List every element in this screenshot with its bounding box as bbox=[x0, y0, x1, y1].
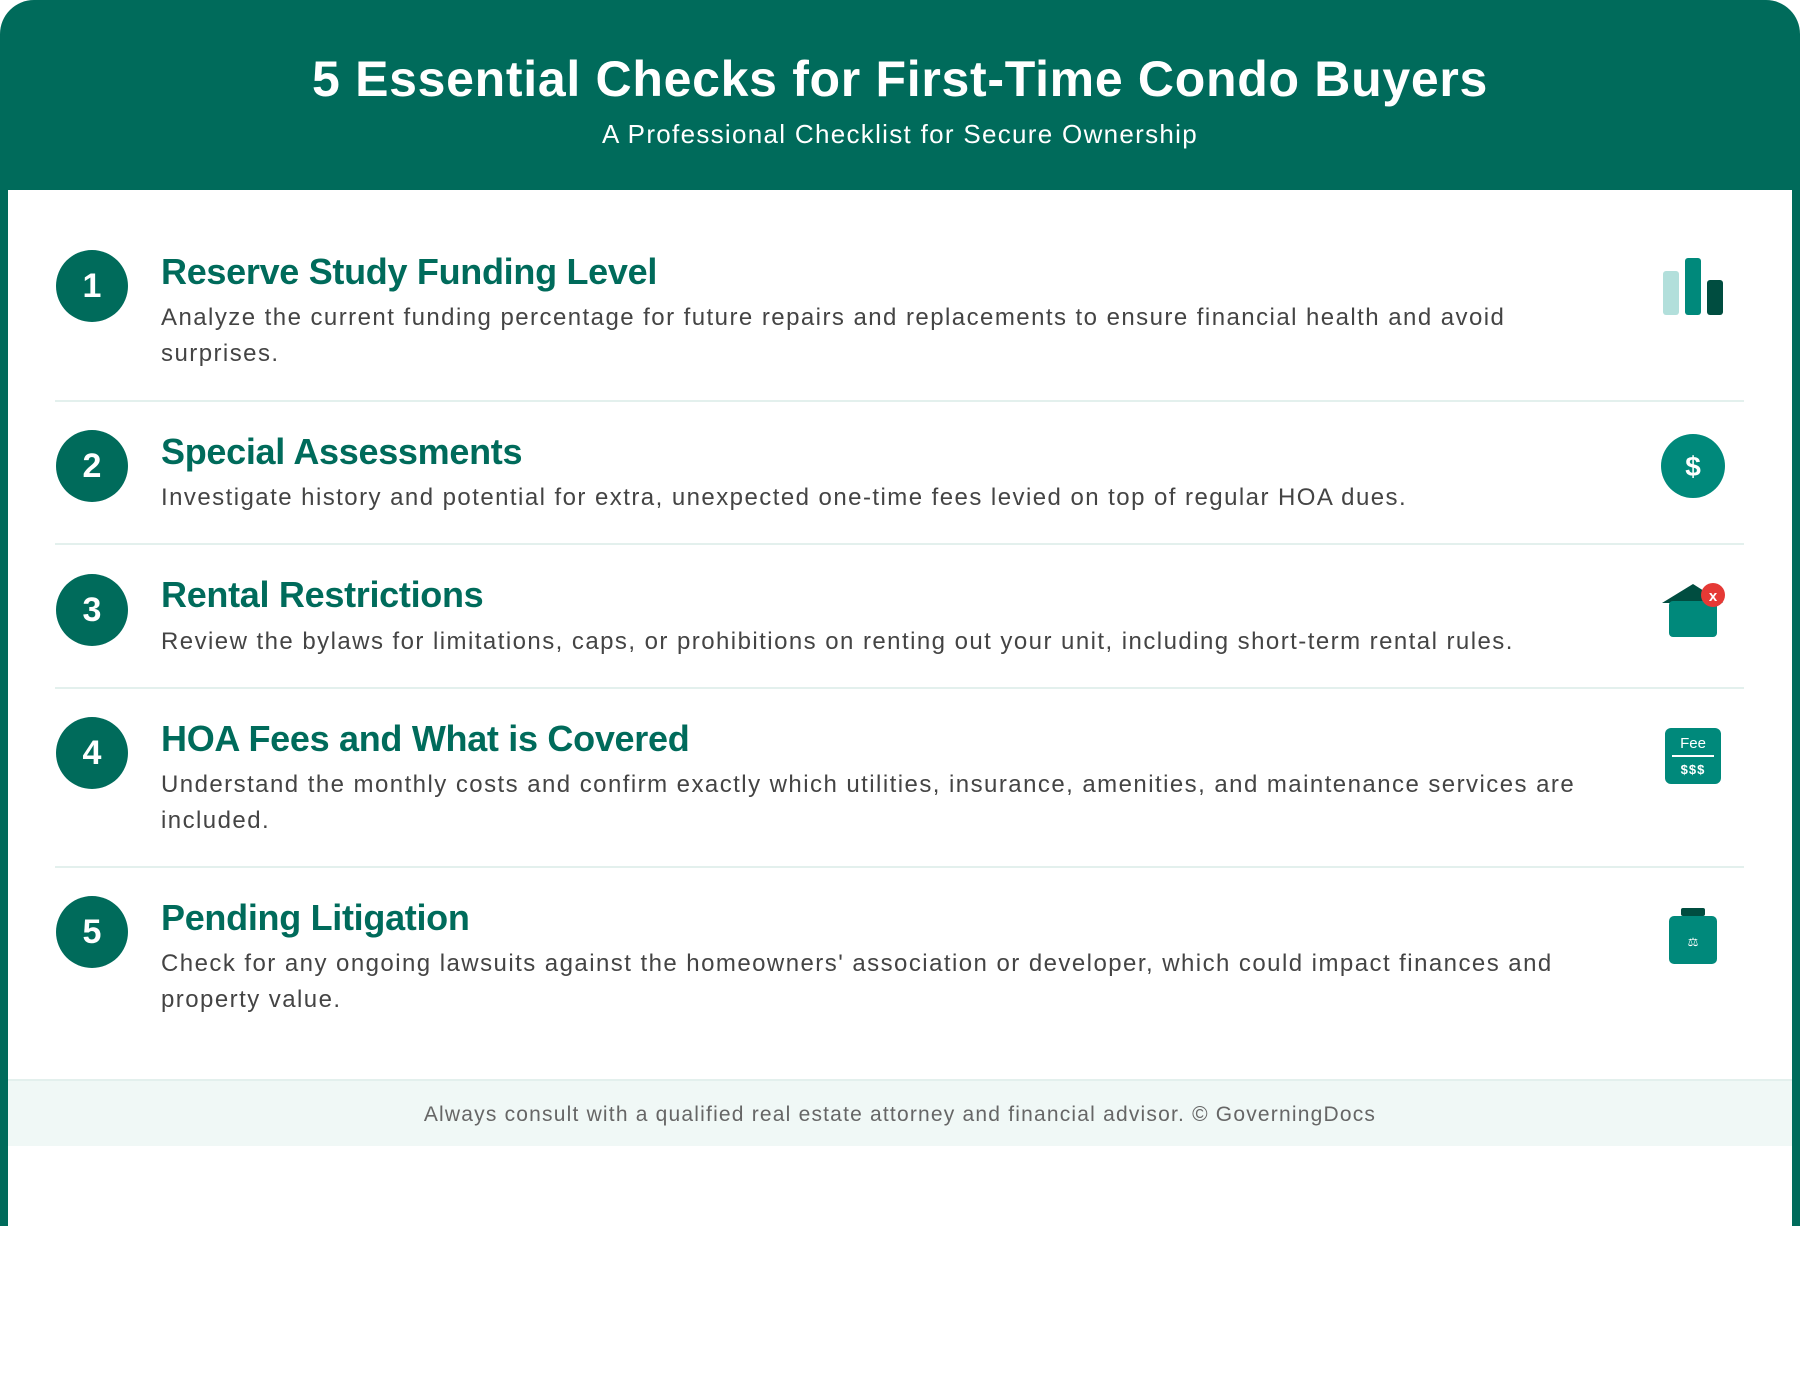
description 5: Check for any ongoing lawsuits against the homeowners' association or developer, which could impact finances and bbox=[161, 950, 1553, 977]
description 2: Investigate history and potential for extra, unexpected one-time fees levied on top of regular HOA dues. bbox=[161, 484, 1407, 511]
icon: fee card bbox=[1665, 728, 1721, 784]
footer: Always consult with a qualified real estate attorney and financial advisor. © GoverningDocs bbox=[424, 1103, 1376, 1126]
heading 4: HOA Fees and What is Covered bbox=[161, 718, 689, 759]
heading 3: Rental Restrictions bbox=[161, 574, 483, 615]
description 1 bbox=[161, 304, 1505, 367]
description 5 bbox=[161, 950, 1553, 1013]
number badge 2: 2 bbox=[83, 447, 101, 485]
item 4 bbox=[56, 717, 1721, 834]
number badge 3: 3 bbox=[83, 591, 101, 629]
icon: bar chart bbox=[1663, 258, 1723, 315]
item 3 bbox=[56, 574, 1725, 655]
number badge 5 bbox=[56, 896, 128, 968]
number badge 3 bbox=[56, 574, 128, 646]
description 1: Analyze the current funding percentage for future repairs and replacements to ensure financial health and avoid bbox=[161, 304, 1505, 331]
content panel bbox=[8, 190, 1792, 1226]
number badge 1: 1 bbox=[83, 267, 101, 305]
icon: house with x: x bbox=[1709, 588, 1718, 605]
subtitle: A Professional Checklist for Secure Ownership bbox=[602, 119, 1198, 149]
heading 5: Pending Litigation bbox=[161, 897, 470, 938]
item 5 bbox=[56, 896, 1717, 1013]
number badge 4 bbox=[56, 717, 128, 789]
description 4 bbox=[161, 771, 1575, 834]
footer bbox=[8, 1079, 1792, 1146]
number badge 1 bbox=[56, 250, 128, 322]
number badge 2 bbox=[56, 430, 128, 502]
icon: briefcase scales bbox=[1669, 908, 1717, 964]
item 2 bbox=[56, 430, 1725, 511]
item 1 bbox=[56, 250, 1723, 367]
heading 2: Special Assessments bbox=[161, 431, 522, 472]
number badge 4: 4 bbox=[83, 734, 101, 772]
icon: fee card: $$$ bbox=[1681, 762, 1705, 777]
icon: house with x bbox=[1662, 583, 1725, 637]
icon: dollar coin bbox=[1661, 434, 1725, 498]
description 5: property value. bbox=[161, 986, 342, 1013]
number badge 5: 5 bbox=[83, 913, 101, 951]
description 3: Review the bylaws for limitations, caps, or prohibitions on renting out your unit, including short-term rental rules. bbox=[161, 628, 1514, 655]
description 4: included. bbox=[161, 807, 270, 834]
icon: fee card: Fee bbox=[1680, 735, 1706, 752]
description 1: surprises. bbox=[161, 340, 280, 367]
icon: dollar coin: $ bbox=[1685, 451, 1701, 482]
title: 5 Essential Checks for First-Time Condo Buyers bbox=[312, 51, 1488, 107]
icon: briefcase scales: ⚖ bbox=[1688, 935, 1699, 949]
heading 1: Reserve Study Funding Level bbox=[161, 251, 657, 292]
description 4: Understand the monthly costs and confirm exactly which utilities, insurance, amenities, and maintenance services are bbox=[161, 771, 1575, 798]
